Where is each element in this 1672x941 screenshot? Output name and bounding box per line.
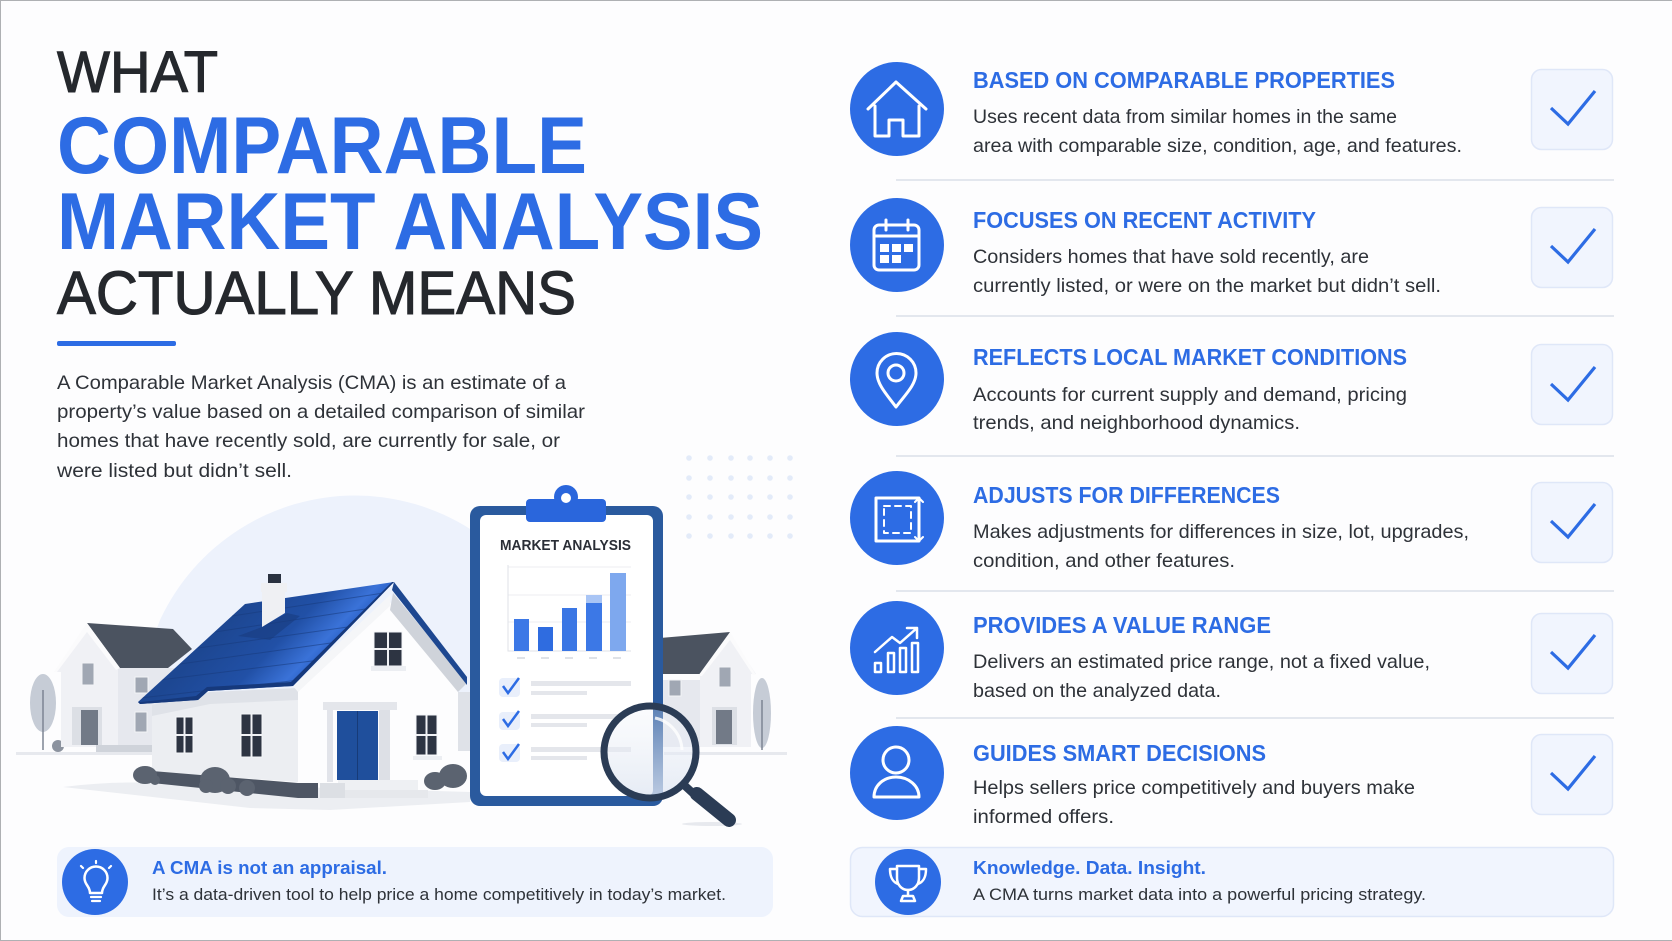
callout: not an appraisal: A CMA is not an appraisal. xyxy=(152,857,387,878)
panel: left column xyxy=(16,40,793,917)
row: provides a value range: PROVIDES A VALUE RANGE xyxy=(973,612,1271,638)
row: reflects local market conditions: trends, and neighborhood dynamics. xyxy=(973,412,1300,434)
panel: right column xyxy=(850,62,1614,916)
porch and door xyxy=(323,702,397,710)
row: based on comparable properties xyxy=(850,62,1612,157)
icon: growth chart xyxy=(875,628,918,672)
icon: location pin xyxy=(877,354,916,407)
title: ACTUALLY MEANS xyxy=(57,259,576,327)
row: guides smart decisions: GUIDES SMART DECISIONS xyxy=(973,740,1266,766)
row: provides a value range: Delivers an estimated price range, not a fixed value, xyxy=(973,651,1430,673)
illustration: magnifying glass xyxy=(604,706,742,826)
row: adjusts for differences xyxy=(850,471,1612,572)
title: COMPARABLE xyxy=(57,101,587,191)
icon: house xyxy=(868,82,926,136)
wing wall xyxy=(152,688,298,782)
icon: resize frame xyxy=(876,498,923,541)
title: MARKET ANALYSIS xyxy=(57,177,763,267)
background circle xyxy=(130,496,560,700)
callout: not an appraisal xyxy=(57,847,773,917)
side extension xyxy=(458,692,472,751)
row: reflects local market conditions: Accounts for current supply and demand, pricing xyxy=(973,384,1407,406)
icon: light bulb xyxy=(81,861,111,901)
icon: calendar xyxy=(874,220,919,270)
intro paragraph: were listed but didn’t sell. xyxy=(56,460,292,482)
base xyxy=(152,771,318,798)
intro paragraph: A Comparable Market Analysis (CMA) is an estimate of a xyxy=(57,372,566,394)
intro paragraph: homes that have recently sold, are currently for sale, or xyxy=(57,430,561,452)
roof xyxy=(138,582,394,704)
gable wall xyxy=(298,602,458,782)
callout: knowledge data insight xyxy=(850,848,1614,916)
callout: knowledge data insight: Knowledge. Data. Insight. xyxy=(973,857,1206,878)
title underline xyxy=(57,341,176,346)
dot pattern xyxy=(686,455,793,539)
row: guides smart decisions: informed offers. xyxy=(973,806,1114,828)
callout: not an appraisal: It’s a data-driven tool to help price a home competitively in today’s market. xyxy=(152,885,726,904)
illustration: main house xyxy=(63,574,472,810)
row: provides a value range: based on the analyzed data. xyxy=(973,680,1221,702)
row: focuses on recent activity xyxy=(850,198,1612,297)
row: adjusts for differences: ADJUSTS FOR DIFFERENCES xyxy=(973,482,1280,508)
row: adjusts for differences: condition, and other features. xyxy=(973,550,1235,572)
row: adjusts for differences: Makes adjustments for differences in size, lot, upgrades, xyxy=(973,521,1469,543)
row: focuses on recent activity: FOCUSES ON RECENT ACTIVITY xyxy=(973,207,1316,233)
icon: person xyxy=(874,747,919,797)
intro paragraph: property’s value based on a detailed comparison of similar xyxy=(57,401,586,423)
steps xyxy=(320,780,428,798)
illustration: left neighbour house xyxy=(16,623,200,755)
row: based on comparable properties: area with comparable size, condition, age, and features. xyxy=(973,135,1462,157)
illustration: right neighbour house xyxy=(660,632,787,755)
checklist xyxy=(499,678,631,762)
title: WHAT xyxy=(57,40,218,105)
row: focuses on recent activity: currently listed, or were on the market but didn’t sell. xyxy=(973,275,1441,297)
row: reflects local market conditions xyxy=(850,332,1612,434)
icon: trophy xyxy=(890,866,926,901)
intro paragraph xyxy=(56,372,586,482)
bar chart xyxy=(508,565,631,658)
bushes xyxy=(133,764,467,796)
row: provides a value range xyxy=(850,601,1612,702)
gable trim xyxy=(390,593,467,692)
ground shadow xyxy=(63,782,470,810)
clip xyxy=(526,485,606,522)
row: reflects local market conditions: REFLECTS LOCAL MARKET CONDITIONS xyxy=(973,344,1407,370)
row: focuses on recent activity: Considers homes that have sold recently, are xyxy=(973,246,1369,268)
title xyxy=(57,40,763,327)
row: guides smart decisions xyxy=(850,726,1612,828)
windows xyxy=(176,632,437,757)
chimney xyxy=(261,583,287,627)
row: based on comparable properties: BASED ON COMPARABLE PROPERTIES xyxy=(973,67,1395,93)
callout: knowledge data insight: A CMA turns market data into a powerful pricing strategy. xyxy=(973,885,1426,904)
clipboard heading: MARKET ANALYSIS xyxy=(500,538,631,554)
row: guides smart decisions: Helps sellers price competitively and buyers make xyxy=(973,777,1415,799)
row: based on comparable properties: Uses recent data from similar homes in the same xyxy=(973,106,1397,128)
illustration: clipboard xyxy=(470,485,663,806)
chimney shadow xyxy=(238,613,300,640)
